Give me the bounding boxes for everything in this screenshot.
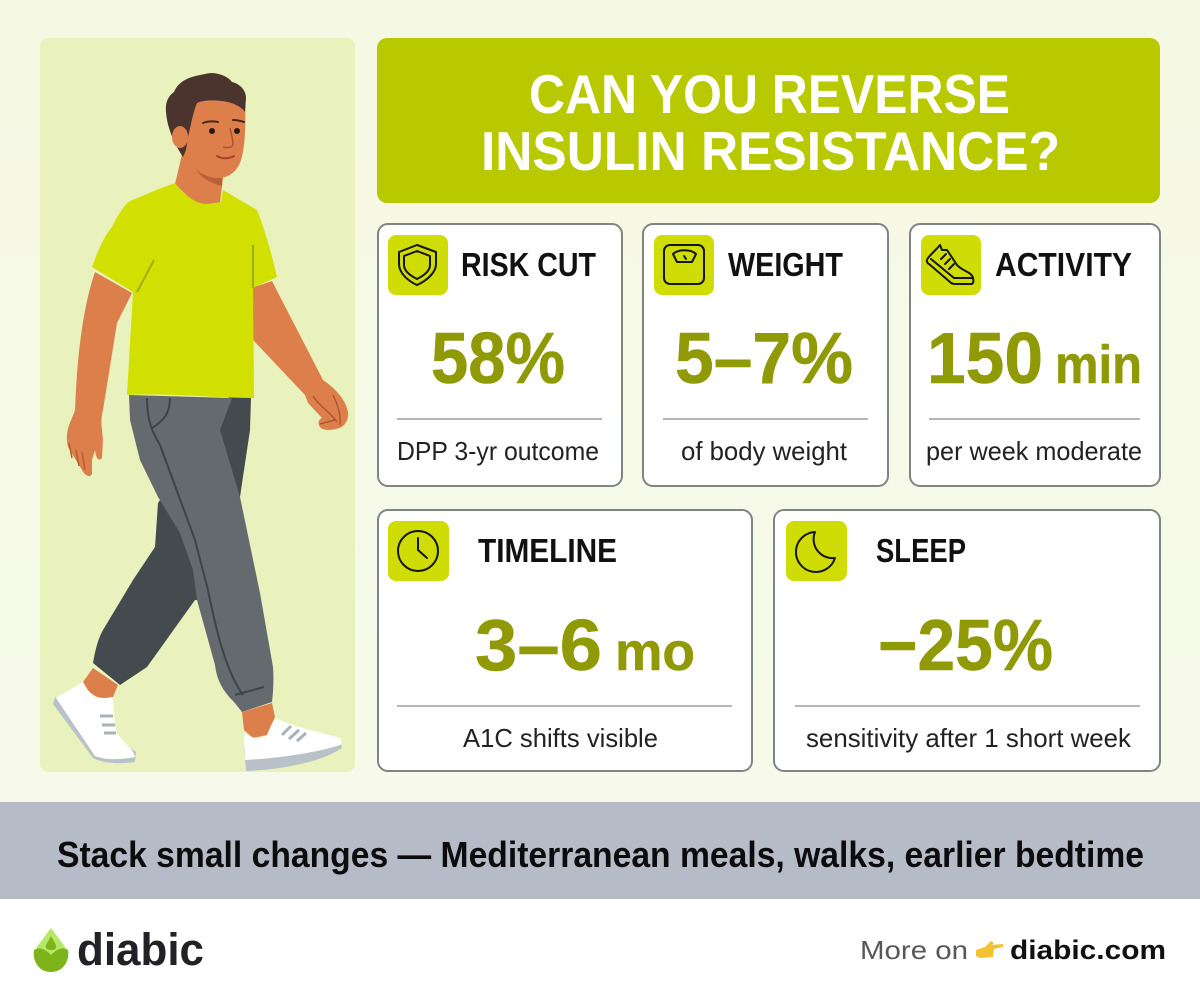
icon: clock <box>398 531 438 571</box>
website link: diabic.com <box>1010 935 1166 965</box>
back shoe <box>53 682 136 763</box>
takeaway band <box>0 802 1200 899</box>
front ankle <box>242 703 275 738</box>
panel: sleep: sensitivity after 1 short week <box>806 723 1132 753</box>
panel: timeline: mo <box>615 622 695 682</box>
panel: risk cut <box>378 224 622 486</box>
shirt <box>92 183 277 398</box>
title banner: CAN YOU REVERSE <box>529 63 1010 125</box>
panel: sleep: −25% <box>878 606 1053 686</box>
face details <box>203 120 244 123</box>
head <box>178 96 245 178</box>
title banner <box>377 38 1160 203</box>
icon: moon <box>796 532 835 572</box>
panel: timeline <box>378 510 752 771</box>
icon: shield <box>399 245 436 285</box>
takeaway band: Stack small changes — Mediterranean meals, walks, earlier bedtime <box>57 834 1144 875</box>
footer <box>0 899 1200 1000</box>
icon: sneaker <box>927 245 973 284</box>
panel: risk cut: 58% <box>431 319 565 399</box>
neck <box>175 150 224 205</box>
front shoe <box>244 718 342 771</box>
panel: weight: 5–7% <box>675 319 853 399</box>
panel: activity: min <box>1055 335 1142 395</box>
front leg <box>129 395 273 712</box>
panel: activity: ACTIVITY <box>995 246 1132 283</box>
panel: weight <box>643 224 888 486</box>
website link: More on <box>860 935 968 965</box>
panel: weight: WEIGHT <box>728 246 843 283</box>
panel: timeline: A1C shifts visible <box>463 723 658 753</box>
panel: timeline: 3–6 <box>475 606 602 686</box>
back ankle <box>83 668 118 702</box>
panel: risk cut: RISK CUT <box>461 246 596 283</box>
back arm <box>67 272 132 476</box>
panel: weight: of body weight <box>681 436 848 466</box>
back leg <box>93 396 251 685</box>
logo: diabic <box>77 924 204 975</box>
front arm <box>252 281 348 430</box>
panel: sleep <box>774 510 1160 771</box>
hair <box>166 73 246 157</box>
ear <box>172 126 188 148</box>
panel: activity: 150 <box>927 319 1043 399</box>
website link <box>860 935 1166 965</box>
panel: timeline: TIMELINE <box>478 532 617 569</box>
panel: sleep: SLEEP <box>876 532 966 569</box>
icon: scale <box>664 245 704 284</box>
panel: risk cut: DPP 3-yr outcome <box>397 436 599 466</box>
title banner: INSULIN RESISTANCE? <box>481 120 1060 182</box>
panel: activity <box>910 224 1160 486</box>
panel: activity: per week moderate <box>926 436 1142 466</box>
panel: walking man illustration <box>40 38 355 772</box>
